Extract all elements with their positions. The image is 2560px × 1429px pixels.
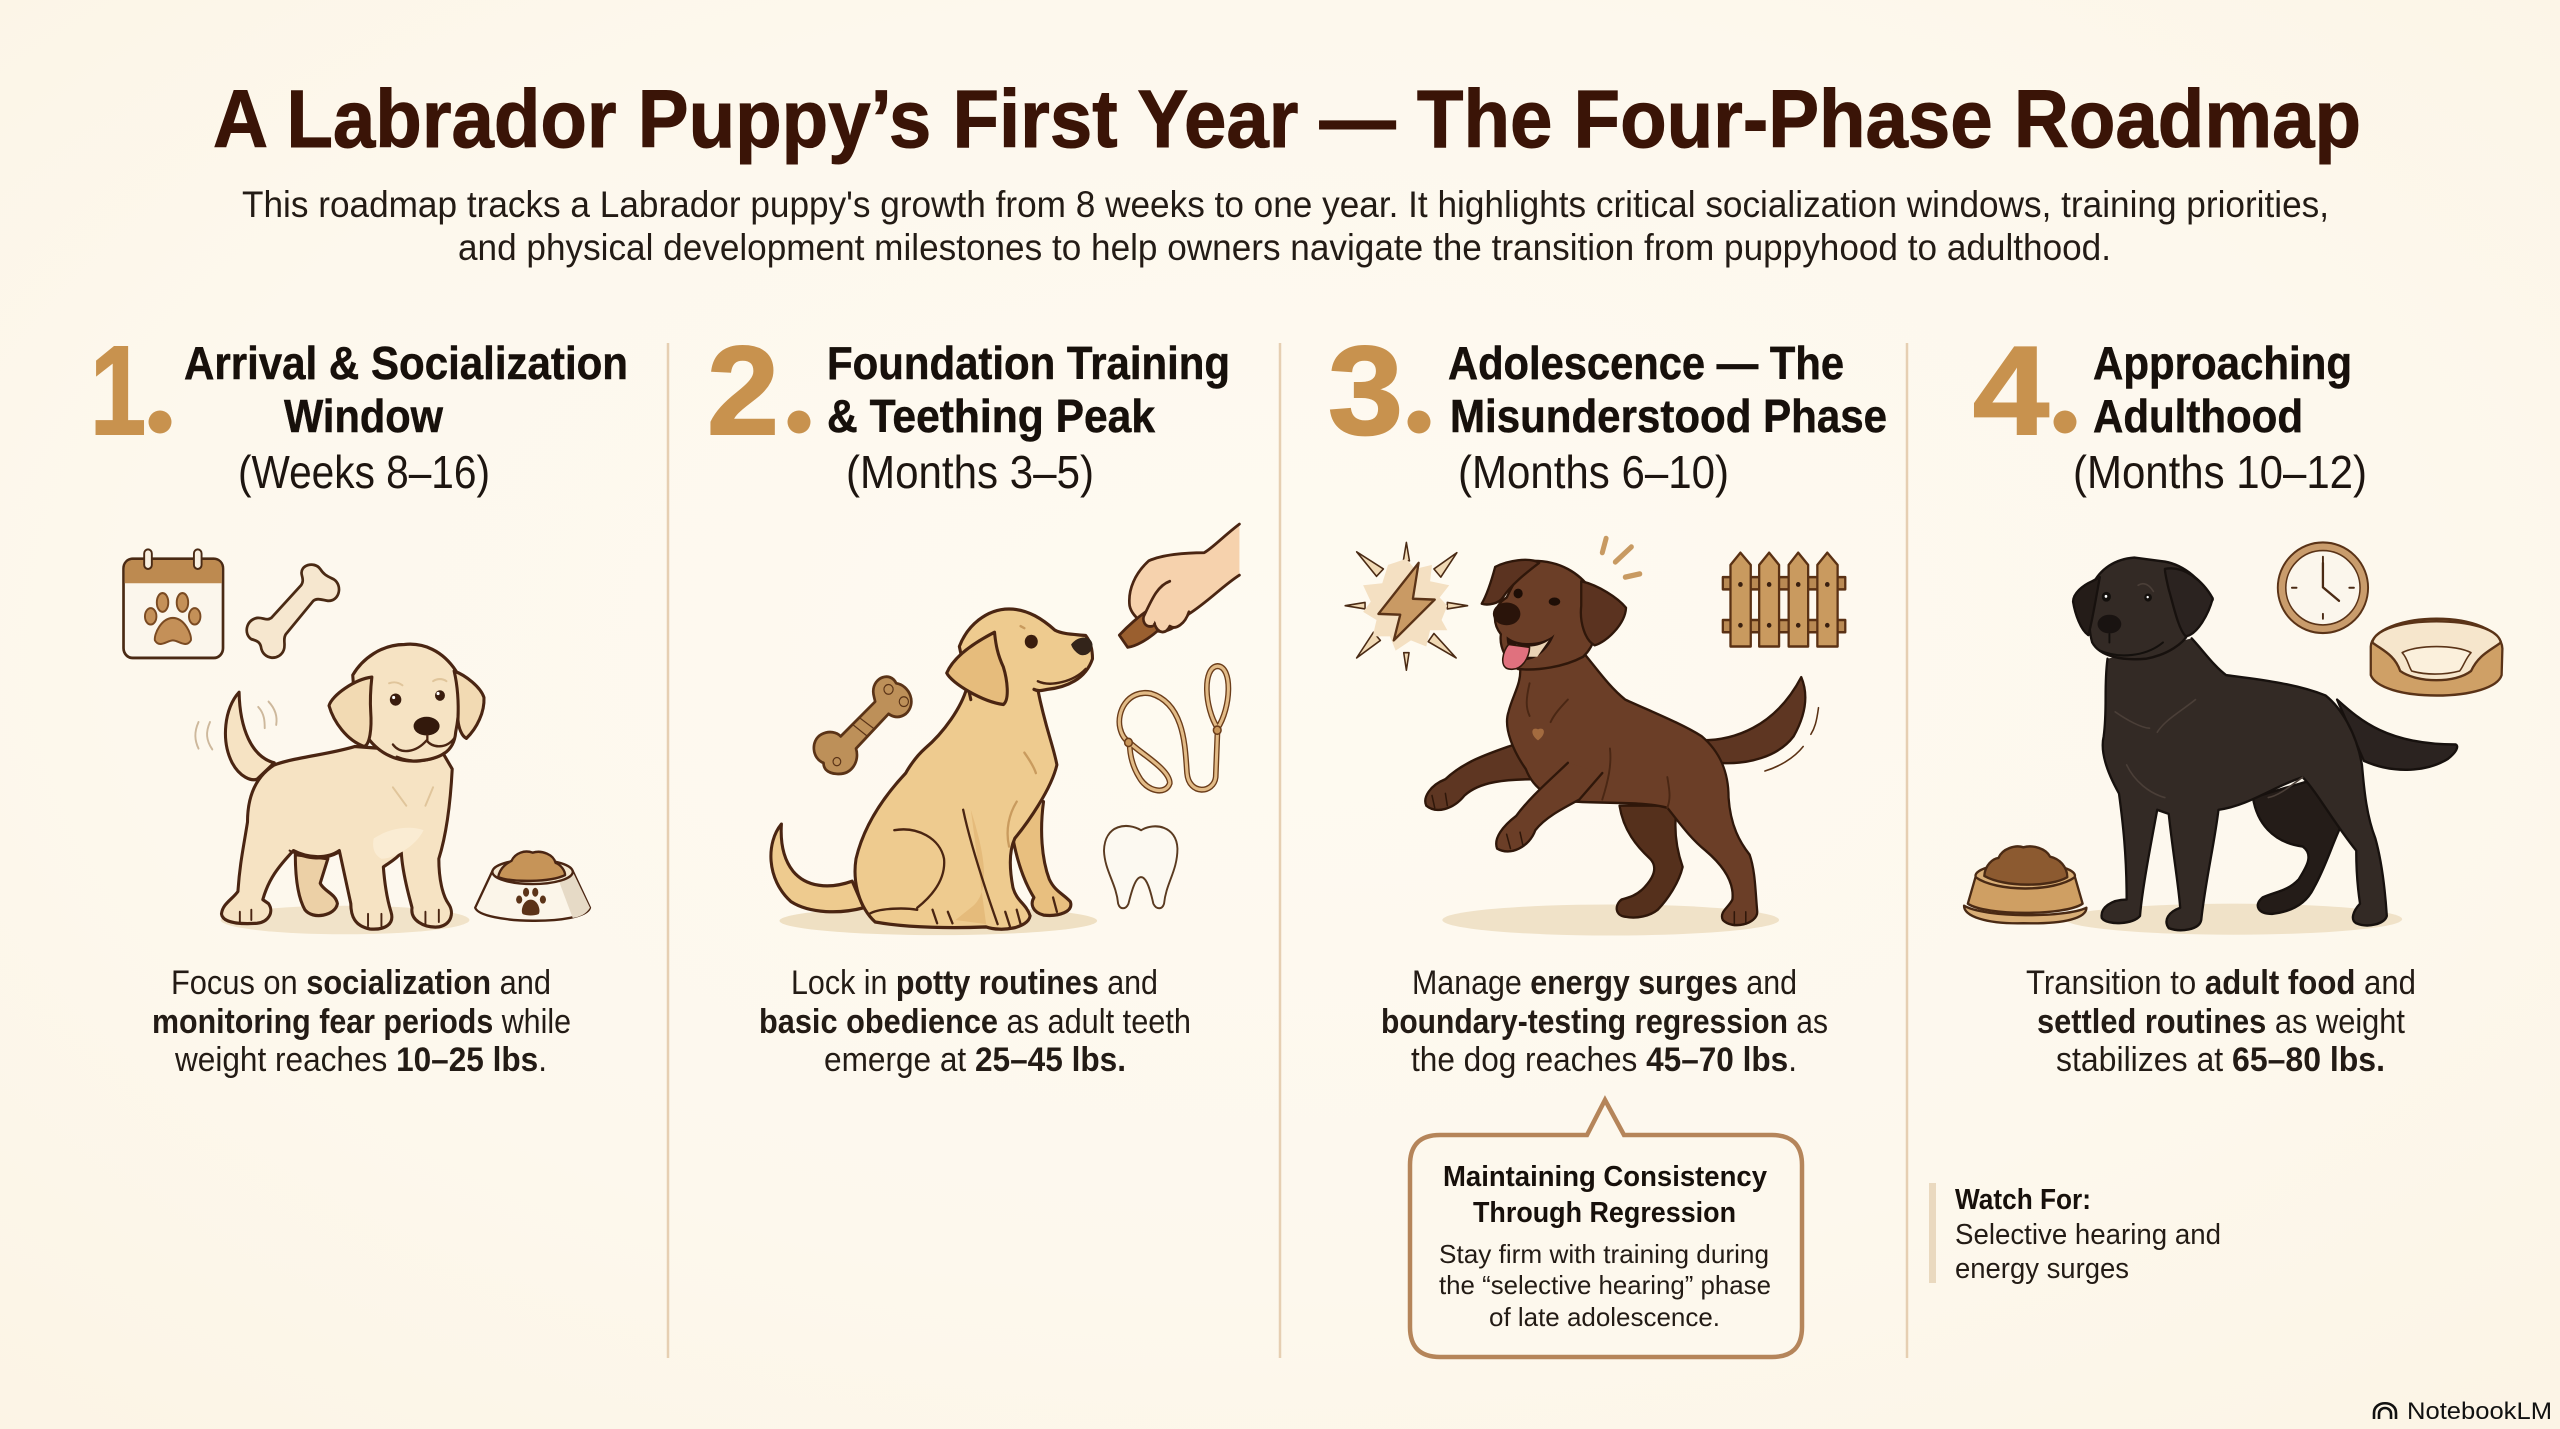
- phase 1 heading: [184, 337, 628, 498]
- puppy details: [869, 626, 1092, 926]
- phase 1 description: monitoring fear periods while: [152, 1003, 571, 1041]
- phase 3 number: [1328, 320, 1430, 461]
- phase 4 description: [2026, 964, 2416, 1079]
- icon: energy burst: [1345, 542, 1468, 670]
- phase 2 description: Lock in potty routines and: [791, 964, 1158, 1002]
- phase 4 description: settled routines as weight: [2037, 1003, 2405, 1041]
- phase 3 description: [1381, 964, 1828, 1079]
- phase 1 heading: Window: [284, 390, 443, 442]
- ground shadow: [2065, 904, 2402, 935]
- phase 2 description: [759, 964, 1191, 1079]
- sitting puppy: [771, 609, 1092, 929]
- phase 3 heading: (Months 6–10): [1458, 446, 1729, 498]
- watch for note: Watch For:: [1955, 1184, 2091, 1216]
- phase 2 heading: Foundation Training: [827, 337, 1230, 389]
- watch for note: energy surges: [1955, 1253, 2129, 1285]
- phase 3 description: Manage energy surges and: [1412, 964, 1797, 1002]
- illustration: black adult lab with clock, bed and bowl: [1964, 542, 2502, 935]
- panel: phase 1: [90, 320, 628, 1079]
- phase 4 description: stabilizes at 65–80 lbs.: [2056, 1041, 2385, 1079]
- icon: fence: [1723, 553, 1845, 647]
- panel: phase 2: [707, 320, 1239, 1079]
- phase 2 number: [707, 320, 810, 461]
- phase 1 description: weight reaches 10–25 lbs.: [174, 1041, 547, 1079]
- phase 4 number: [1973, 320, 2076, 461]
- phase 4 number: 4: [1973, 320, 2049, 461]
- callout: maintaining consistency: the “selective hearing” phase: [1439, 1270, 1771, 1300]
- phase 3 heading: [1448, 337, 1887, 498]
- ground shadow: [221, 906, 469, 934]
- icon: clock: [2278, 542, 2368, 633]
- panel: phase 4: [1929, 320, 2502, 1285]
- panel: phase 3: [1328, 320, 1887, 1357]
- puppy face: [240, 679, 454, 926]
- callout: maintaining consistency: Through Regression: [1473, 1197, 1736, 1229]
- icon: dog bed: [2371, 619, 2502, 696]
- lab face and details: [2098, 584, 2303, 798]
- intro text: and physical development milestones to help owners navigate the transition from puppyhood to adulthood.: [458, 227, 2111, 268]
- phase 3 description: the dog reaches 45–70 lbs.: [1411, 1041, 1797, 1079]
- icon: hand with treat: [1119, 524, 1239, 647]
- icon: food bowl: [1964, 846, 2086, 923]
- ground shadow: [779, 907, 1097, 935]
- phase 4 heading: [2073, 337, 2367, 498]
- phase 3 heading: Misunderstood Phase: [1450, 390, 1887, 442]
- phase 2 heading: (Months 3–5): [846, 446, 1094, 498]
- watch for note: [1929, 1183, 2221, 1285]
- chocolate dog: [1425, 560, 1805, 925]
- icon: tooth: [1104, 826, 1177, 908]
- illustration: chocolate adolescent dog with energy burst and fence: [1345, 538, 1845, 936]
- phase 4 description: Transition to adult food and: [2026, 964, 2416, 1002]
- phase 4 heading: (Months 10–12): [2073, 446, 2367, 498]
- phase 2 heading: & Teething Peak: [827, 390, 1155, 442]
- motion lines: [195, 702, 277, 749]
- phase 3 number: 3: [1328, 320, 1403, 461]
- watch for note: Selective hearing and: [1955, 1219, 2221, 1251]
- callout: maintaining consistency: Stay firm with training during: [1439, 1239, 1769, 1269]
- title: A Labrador Puppy’s First Year — The Four-Phase Roadmap: [213, 74, 2361, 165]
- phase 3 heading: Adolescence — The: [1448, 337, 1844, 389]
- ground shadow: [1442, 904, 1779, 936]
- phase 2 description: basic obedience as adult teeth: [759, 1003, 1191, 1041]
- black labrador: [2073, 558, 2457, 930]
- intro text: This roadmap tracks a Labrador puppy's growth from 8 weeks to one year. It highlights critical socialization windows, training priorities,: [242, 184, 2329, 225]
- wag lines: [1765, 708, 1818, 771]
- phase 1 number: 1: [90, 320, 146, 461]
- icon: food bowl: [475, 852, 590, 921]
- phase 2 description: emerge at 25–45 lbs.: [824, 1041, 1126, 1079]
- icon: calendar with paw: [124, 549, 223, 658]
- icon: biscuit bone: [814, 677, 911, 774]
- intro text: [242, 184, 2329, 268]
- phase 1 description: [152, 964, 571, 1079]
- phase 4 heading: Adulthood: [2093, 390, 2303, 442]
- phase 1 description: Focus on socialization and: [171, 964, 551, 1002]
- phase 2 number: 2: [707, 320, 779, 461]
- phase 2 heading: [827, 337, 1230, 498]
- dog face and chest: [1432, 589, 1746, 924]
- illustration: cream puppy with calendar, bone and bowl: [124, 549, 590, 934]
- callout: maintaining consistency: Maintaining Consistency: [1443, 1161, 1767, 1193]
- callout: maintaining consistency: of late adolescence.: [1489, 1302, 1720, 1332]
- phase 4 heading: Approaching: [2093, 337, 2352, 389]
- NotebookLM logo: NotebookLM: [2407, 1398, 2552, 1425]
- excitement marks: [1602, 538, 1640, 577]
- icon: bone: [247, 565, 339, 658]
- puppy: [221, 644, 484, 929]
- icon: leash: [1119, 666, 1228, 791]
- phase 3 description: boundary-testing regression as: [1381, 1003, 1828, 1041]
- phase 1 heading: (Weeks 8–16): [238, 446, 490, 498]
- phase 1 heading: Arrival & Socialization: [184, 337, 628, 389]
- illustration: sitting yellow puppy with hand treat, bone, leash and tooth: [771, 524, 1239, 935]
- callout: maintaining consistency: [1410, 1100, 1802, 1357]
